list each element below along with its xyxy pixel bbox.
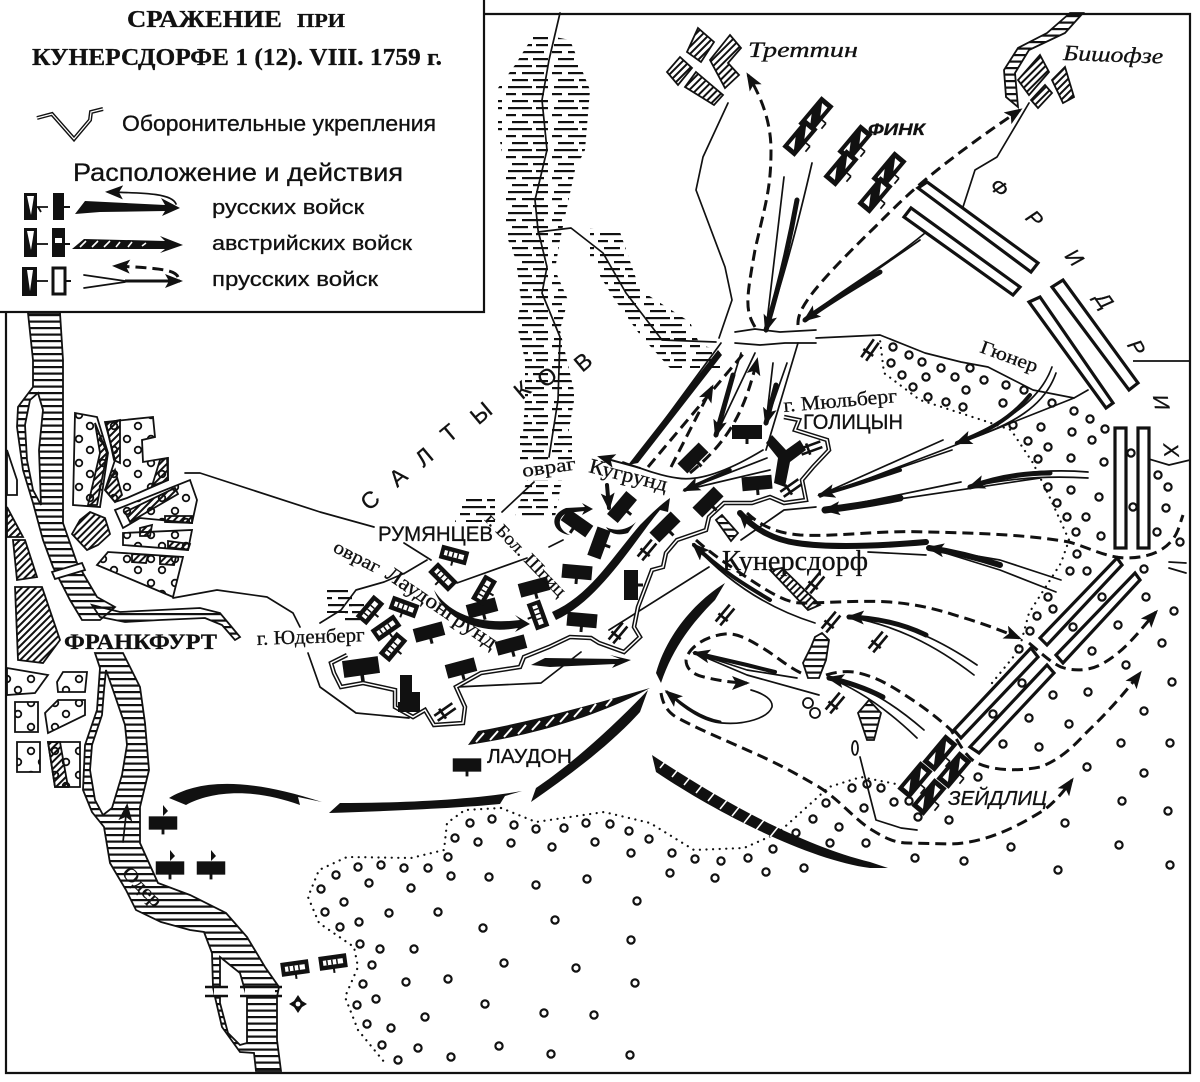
map labels: г. Бол. Шпиц	[481, 509, 571, 601]
map labels: А	[384, 462, 413, 492]
ponds	[803, 633, 881, 755]
map labels: К	[509, 375, 536, 404]
map labels: Л	[410, 442, 438, 472]
terrain: slope hatching	[327, 33, 720, 622]
Prussian dashed manoeuvres	[648, 75, 1183, 844]
legend row: Russian	[24, 192, 364, 220]
title: КУНЕРСДОРФЕ 1 (12). VIII. 1759 г.	[32, 45, 442, 71]
legend: fortification: Оборонительные укрепления	[122, 111, 436, 136]
legend row: Prussian	[22, 266, 378, 296]
map labels: Д	[1089, 287, 1118, 314]
map labels: Бишофзе	[1062, 40, 1164, 68]
map labels: ФИНК	[868, 120, 927, 139]
map labels: Кунерсдорф	[722, 546, 868, 577]
map labels: овраг	[330, 537, 384, 578]
title: ПРИ	[297, 10, 345, 32]
legend row: Austrian: австрийских войск	[212, 233, 412, 255]
map labels: Х	[1158, 441, 1183, 459]
map labels: О	[532, 361, 562, 393]
fort marker south of Frankfurt road	[289, 995, 307, 1013]
village: Trettin	[667, 28, 741, 105]
river: Oder north section	[17, 313, 115, 620]
map labels: В	[569, 347, 597, 377]
map labels: Гюнер	[977, 337, 1041, 377]
map labels: Т	[435, 419, 463, 447]
legend row: Prussian: прусских войск	[212, 269, 378, 291]
creek near Frankfurt	[92, 605, 240, 640]
map labels: РУМЯНЦЕВ	[378, 523, 493, 546]
map labels: Треттин	[748, 37, 858, 62]
Prussian columns: Friedrich	[904, 182, 1149, 753]
Austrian hatched arrows	[468, 688, 888, 868]
map labels: И	[1148, 393, 1173, 413]
legend: fortification	[37, 109, 436, 139]
map labels: Р	[1021, 206, 1047, 232]
forest edge dotted lines	[308, 340, 1069, 1063]
map labels: Ф	[985, 174, 1013, 202]
Prussian attack arrows	[600, 163, 1088, 738]
map labels: ЗЕЙДЛИЦ	[948, 787, 1047, 810]
title	[32, 7, 442, 71]
Russian counter-attack arrows	[169, 350, 725, 813]
Frankfurt town blocks	[7, 413, 197, 787]
map labels: г. Юденберг	[256, 624, 365, 650]
Austrian units	[280, 545, 549, 981]
map labels: Р	[1122, 336, 1149, 360]
legend row: Austrian	[24, 228, 412, 257]
Prussian units: Fink and Seydlitz	[782, 96, 976, 819]
map labels: овраг	[521, 454, 577, 482]
map labels: Лаудонгрунд	[381, 561, 503, 654]
title: СРАЖЕНИЕ	[127, 7, 282, 33]
map labels: Кугрунд	[587, 454, 671, 496]
map labels: ЛАУДОН	[487, 746, 572, 768]
map labels: Одер	[117, 863, 166, 911]
Russian units	[149, 425, 806, 879]
streams and thin terrain lines	[173, 13, 1190, 830]
dike markers	[433, 338, 890, 723]
map labels: ГОЛИЦЫН	[803, 411, 903, 434]
Russian fortification line	[331, 417, 829, 725]
map labels: С	[355, 485, 385, 515]
map labels: г. Мюльберг	[783, 385, 898, 417]
river: Oder south section	[83, 653, 282, 1071]
Kunersdorf village	[716, 515, 820, 610]
village and lake: Bischofsee	[1004, 13, 1083, 108]
map labels: Ы	[465, 396, 497, 430]
forest circles	[317, 343, 1184, 1064]
legend panel	[0, 0, 484, 312]
map labels: И	[1060, 245, 1088, 272]
legend heading: Расположение и действия	[73, 159, 403, 187]
map labels	[64, 37, 1183, 911]
legend row: Russian: русских войск	[212, 197, 364, 219]
map labels: ФРАНКФУРТ	[64, 629, 217, 654]
